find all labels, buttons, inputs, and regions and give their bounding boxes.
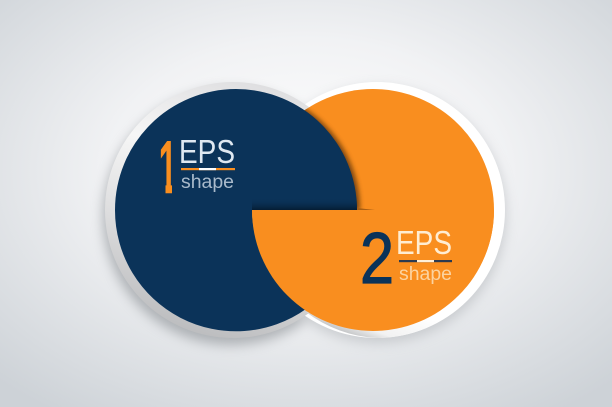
shape label 2: shape: [399, 264, 452, 285]
panel: diagram: [103, 82, 506, 345]
navy shadow on orange: [304, 108, 364, 208]
EPS heading 1: EPS: [179, 133, 235, 170]
divider 2: [399, 260, 452, 262]
orange disc: [252, 89, 494, 331]
shape label 1: shape: [181, 172, 234, 193]
label 2: [360, 219, 452, 299]
label 1: [160, 140, 235, 194]
orange lower half: [252, 210, 494, 331]
EPS heading 2: EPS: [396, 224, 452, 261]
label 1: 1: [158, 128, 178, 208]
divider 1: [181, 168, 235, 170]
panel: navy disc: [115, 89, 357, 331]
shadow above orange tab: [252, 198, 357, 210]
panel: navy ring: [105, 82, 309, 338]
panel: orange ring: [249, 82, 505, 338]
orange lower ring: [306, 285, 480, 338]
ground shadow: [103, 87, 506, 345]
number 2: 2: [360, 219, 394, 299]
